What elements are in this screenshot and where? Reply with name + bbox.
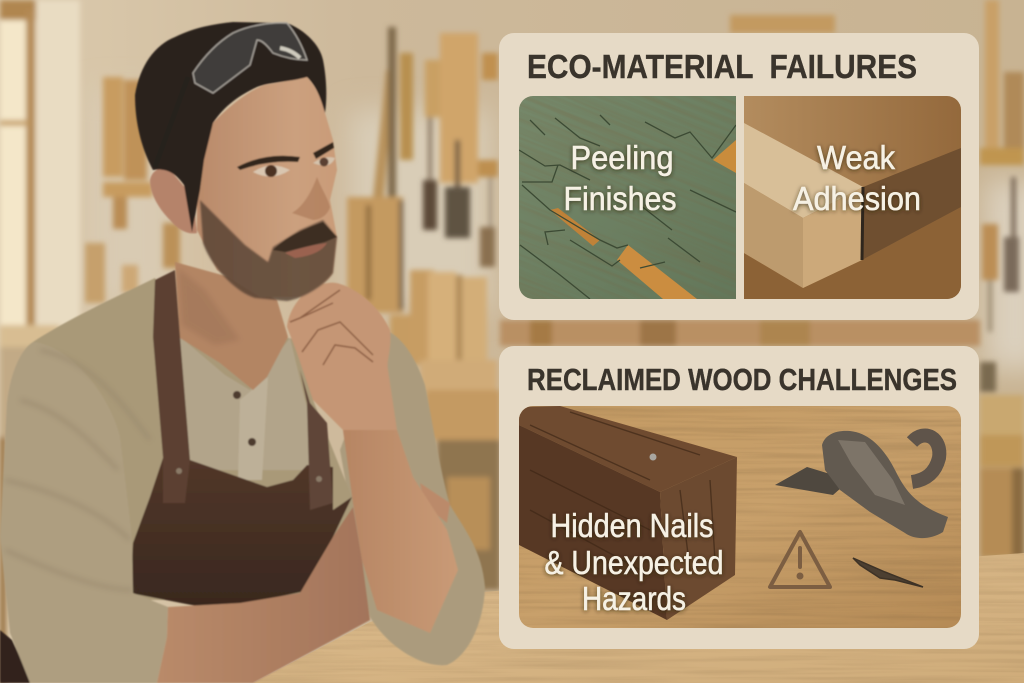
shirt buttons <box>233 391 256 446</box>
beard <box>200 200 337 301</box>
panel: eco-material failures <box>499 33 979 320</box>
icon: bent nail <box>853 558 923 587</box>
moustache <box>273 222 337 252</box>
apron strap left <box>153 270 190 503</box>
safety goggles <box>155 23 307 167</box>
eyebrows <box>237 156 300 170</box>
apron lower left <box>0 630 32 683</box>
lower boards <box>390 315 420 360</box>
neck <box>175 262 288 390</box>
henley shirt front <box>178 335 325 470</box>
heading: eco-material failures: ECO-MATERIAL FAILURES <box>527 48 917 85</box>
icon: nail head <box>650 454 656 460</box>
label: hidden nails and hazards: & Unexpected <box>544 544 724 581</box>
hair <box>135 22 326 232</box>
face <box>197 77 337 297</box>
centre tools <box>373 70 394 197</box>
finger lines <box>290 290 373 365</box>
apron strap right <box>300 370 333 510</box>
eyes <box>253 165 290 177</box>
crossed forearm <box>157 507 370 683</box>
right wall items <box>985 0 999 148</box>
label: peeling finishes: Peeling <box>570 139 674 176</box>
wooden table <box>253 553 1024 683</box>
strip between panels <box>500 320 980 346</box>
worried craftsman <box>0 22 485 683</box>
left shelf <box>103 77 123 177</box>
forearm <box>343 430 458 633</box>
apron rivets <box>176 468 322 482</box>
window <box>0 0 30 330</box>
mouth <box>285 243 327 258</box>
hand <box>287 283 397 430</box>
image: reclaimed beam, metal plane and nail <box>519 406 961 628</box>
label: hidden nails and hazards <box>544 507 724 617</box>
label: weak adhesion: Adhesion <box>793 180 921 217</box>
sweater torso <box>33 278 353 600</box>
sleeve folds <box>5 350 150 590</box>
label: hidden nails and hazards: Hazards <box>582 580 686 617</box>
nose <box>292 177 330 220</box>
label: hidden nails and hazards: Hidden Nails <box>550 507 714 544</box>
label: weak adhesion <box>793 139 921 217</box>
icon: metal hand plane <box>775 431 948 538</box>
panel: reclaimed wood challenges <box>499 346 979 649</box>
image: peeling finishes <box>519 96 736 299</box>
icon: warning triangle <box>770 532 830 587</box>
icon: reclaimed wood beam <box>519 406 737 620</box>
label: peeling finishes <box>564 139 676 217</box>
tucked fingers <box>420 483 450 523</box>
right top board <box>730 15 835 33</box>
label: weak adhesion: Weak <box>817 139 895 176</box>
ear <box>150 168 197 233</box>
soft wall light <box>90 90 1024 370</box>
right shoulder sleeve <box>340 330 485 665</box>
apron bib <box>130 458 352 610</box>
label: peeling finishes: Finishes <box>564 180 676 217</box>
shirt placket <box>238 377 268 480</box>
left sleeve <box>0 342 168 683</box>
image: weak adhesion <box>744 96 961 299</box>
